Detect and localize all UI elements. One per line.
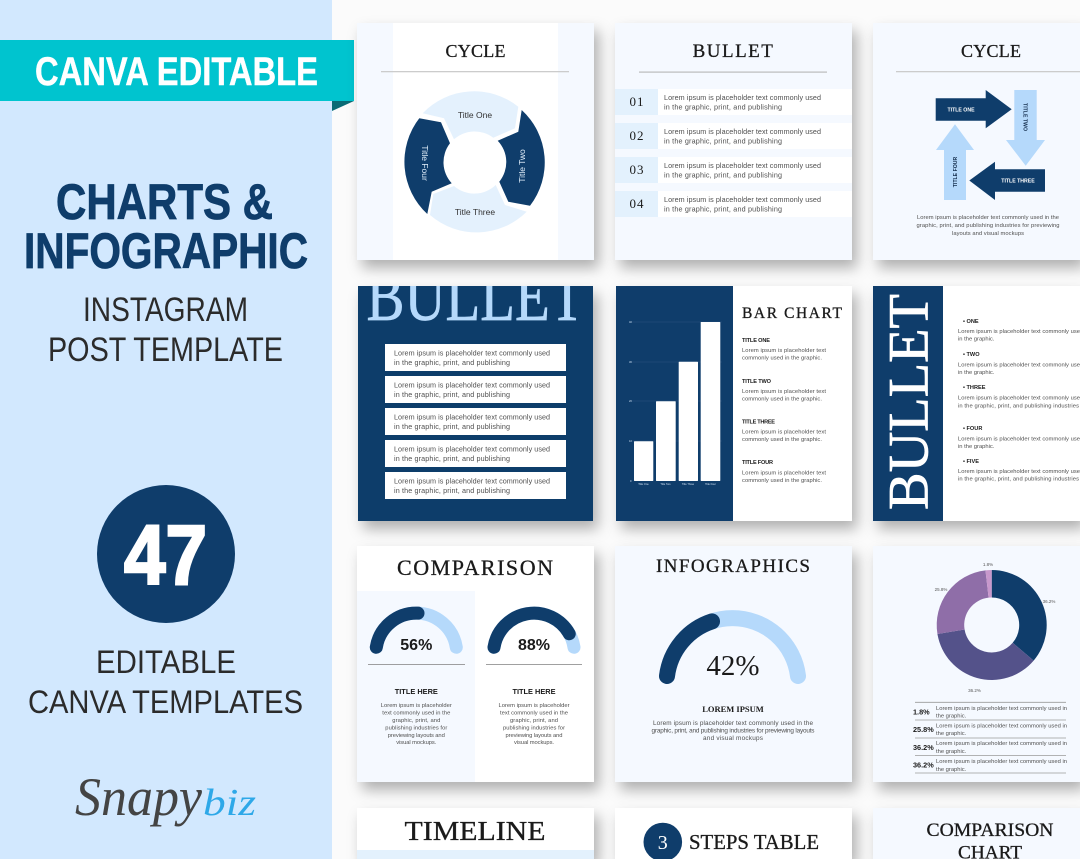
bullet rows: Lorem ipsum is placeholder text commonly used xyxy=(664,127,821,136)
bar chart: 20 xyxy=(629,399,632,403)
data table: 36.2% xyxy=(913,743,934,752)
caption: Lorem ipsum is placeholder text commonly used in the xyxy=(653,720,813,727)
heading xyxy=(926,820,1054,859)
column: right text: graphic, print, and xyxy=(510,718,558,724)
data table: 1.8% xyxy=(913,708,930,716)
body text xyxy=(916,215,1060,237)
bullet rows: 02 xyxy=(630,128,644,143)
data table: Lorem ipsum is placeholder text commonly used in xyxy=(936,759,1067,765)
bullet rows: Lorem ipsum is placeholder text commonly used xyxy=(664,161,821,170)
bar chart: 0 xyxy=(630,479,632,483)
data table: Lorem ipsum is placeholder text commonly used in xyxy=(936,706,1067,712)
chart notes: Lorem ipsum is placeholder text xyxy=(742,389,826,395)
cycle diagram: Title Three xyxy=(455,207,495,217)
caption: editable canva templates: CANVA TEMPLATES xyxy=(28,684,303,720)
data table: 25.8% xyxy=(913,725,934,734)
cycle diagram xyxy=(404,91,545,232)
panel: bar chart xyxy=(616,286,852,521)
bullet rows: in the graphic, print, and publishing xyxy=(664,170,782,180)
bullet boxes: Lorem ipsum is placeholder text commonly used xyxy=(394,444,550,454)
chart notes: Lorem ipsum is placeholder text xyxy=(742,430,826,436)
panel: comparison chart xyxy=(873,808,1080,859)
caption xyxy=(652,704,814,742)
panel: bullet vertical xyxy=(873,286,1080,521)
banner: canva editable: CANVA EDITABLE xyxy=(35,50,318,94)
column: right text: visual mockups. xyxy=(514,740,554,746)
bullet rows: Lorem ipsum is placeholder text commonly used xyxy=(664,195,821,204)
bar chart: Title One xyxy=(638,482,649,486)
arrow: title four: TITLE FOUR xyxy=(953,156,959,187)
chart notes: TITLE THREE xyxy=(742,420,775,426)
data table: the graphic. xyxy=(936,749,967,755)
bullet rows: 04 xyxy=(630,196,644,211)
data table: the graphic. xyxy=(936,714,967,720)
bullet list: Lorem ipsum is placeholder text commonly use xyxy=(958,436,1080,442)
chart notes: Lorem ipsum is placeholder text xyxy=(742,470,826,476)
bar chart: 40 xyxy=(629,320,632,324)
caption: editable canva templates xyxy=(28,644,303,720)
bullet list: Lorem ipsum is placeholder text commonly use xyxy=(958,329,1080,335)
arrow: title two xyxy=(1006,90,1045,166)
column: left text: visual mockups. xyxy=(396,740,437,746)
panel: infographics gauge xyxy=(615,546,852,782)
bullet rows: in the graphic, print, and publishing xyxy=(664,136,782,146)
step badge xyxy=(644,823,682,859)
banner: canva editable xyxy=(0,40,354,111)
heading: CYCLE xyxy=(961,41,1021,61)
bullet rows: Lorem ipsum is placeholder text commonly used xyxy=(664,93,821,102)
bullet boxes: in the graphic, print, and publishing xyxy=(394,358,510,367)
heading: INFOGRAPHICS xyxy=(656,556,810,577)
panel: comparison xyxy=(357,546,594,782)
body text: graphic, print, and publishing industries for previewing xyxy=(916,223,1060,229)
bullet boxes xyxy=(385,344,566,499)
bullet boxes: in the graphic, print, and publishing xyxy=(394,486,510,495)
panel: cycle donut xyxy=(357,23,594,260)
heading clipped: BULLET xyxy=(366,259,584,336)
column: left text xyxy=(381,687,452,746)
bullet list: Lorem ipsum is placeholder text commonly use xyxy=(958,362,1080,368)
arrow: title one xyxy=(936,90,1012,128)
heading: BULLET xyxy=(693,41,774,62)
arrow: title four xyxy=(936,124,974,200)
heading: CYCLE xyxy=(446,41,506,61)
bullet list: • TWO xyxy=(963,352,980,358)
bullet boxes: Lorem ipsum is placeholder text commonly used xyxy=(394,476,550,486)
bullet list: in the graphic. xyxy=(958,370,995,376)
chart notes: commonly used in the graphic. xyxy=(742,356,822,362)
gauge: 88%: 88% xyxy=(518,637,550,654)
gauge: 56%: 56% xyxy=(400,637,432,654)
logo: snapybiz: biz xyxy=(203,782,256,824)
heading: charts and infographic: CHARTS & xyxy=(56,174,273,230)
bullet rows: 01 xyxy=(630,94,644,109)
badge: 47: 47 xyxy=(124,508,207,602)
caption: LOREM IPSUM xyxy=(702,704,764,714)
column: left text: Lorem ipsum is placeholder xyxy=(381,703,452,709)
arrow: title one: TITLE ONE xyxy=(947,108,975,114)
heading: STEPS TABLE xyxy=(689,830,819,854)
body text: layouts and visual mockups xyxy=(952,231,1024,237)
column: left text: text commonly used in the xyxy=(382,710,450,716)
bullet rows: in the graphic, print, and publishing xyxy=(664,102,782,112)
bullet list: • THREE xyxy=(963,385,986,391)
chart notes: TITLE TWO xyxy=(742,379,772,385)
bullet list: in the graphic, print, and publishing industries xyxy=(958,476,1079,482)
caption: editable canva templates: EDITABLE xyxy=(96,644,236,680)
panel: timeline xyxy=(357,808,594,859)
body text: Lorem ipsum is placeholder text commonly used in the xyxy=(917,215,1059,221)
panel: steps table xyxy=(615,808,852,859)
cycle diagram: Title One xyxy=(458,110,492,120)
bar chart: 10 xyxy=(629,439,632,443)
column: right text: TITLE HERE xyxy=(512,687,556,696)
column: right text: previewing layouts and xyxy=(506,733,562,739)
data table: Lorem ipsum is placeholder text commonly used in xyxy=(936,741,1067,747)
data table: the graphic. xyxy=(936,731,967,737)
bullet boxes: in the graphic, print, and publishing xyxy=(394,390,510,399)
chart notes: TITLE ONE xyxy=(742,338,770,344)
cycle diagram: Title Four xyxy=(420,145,430,181)
panel: bullet list light xyxy=(615,23,852,260)
bullet list: • FOUR xyxy=(963,426,982,432)
bullet boxes: in the graphic, print, and publishing xyxy=(394,422,510,431)
logo: snapybiz: Snapy xyxy=(75,767,202,827)
heading: TIMELINE xyxy=(404,816,546,846)
bullet list: • ONE xyxy=(963,319,979,325)
bar chart: Title Two xyxy=(660,482,671,486)
bullet rows xyxy=(615,89,852,217)
panel: cycle arrows xyxy=(873,23,1080,260)
column: right text: text commonly used in the xyxy=(500,710,568,716)
bar chart: Title Three xyxy=(682,482,695,486)
arrow: title two: TITLE TWO xyxy=(1022,103,1028,131)
panel: donut chart xyxy=(873,546,1080,782)
chart notes: TITLE FOUR xyxy=(742,460,773,466)
heading: COMPARISON xyxy=(926,820,1054,841)
subheading: instagram post template: INSTAGRAM xyxy=(83,291,248,329)
data table xyxy=(913,702,1067,773)
bullet list: • FIVE xyxy=(963,459,979,465)
heading vertical: BULLET xyxy=(878,294,940,510)
bullet boxes: Lorem ipsum is placeholder text commonly used xyxy=(394,380,550,390)
data table: 36.2% xyxy=(913,760,934,770)
gauge: 56% xyxy=(376,613,456,654)
chart notes xyxy=(742,338,826,484)
bar chart xyxy=(629,320,722,486)
column: left text: previewing layouts and xyxy=(388,733,445,739)
bullet boxes: Lorem ipsum is placeholder text commonly used xyxy=(394,348,550,358)
bullet list: in the graphic, print, and publishing industries xyxy=(958,404,1079,410)
donut chart: 36.2% xyxy=(968,688,981,693)
data table: Lorem ipsum is placeholder text commonly used in xyxy=(936,724,1067,730)
column: left text: publishing industries for xyxy=(385,726,447,732)
heading: COMPARISON xyxy=(397,555,553,580)
bullet rows: in the graphic, print, and publishing xyxy=(664,204,782,214)
chart notes: commonly used in the graphic. xyxy=(742,396,822,402)
column: right text: Lorem ipsum is placeholder xyxy=(498,703,570,709)
donut chart xyxy=(935,562,1055,693)
badge: 47 xyxy=(97,485,235,623)
caption: graphic, print, and publishing industries for previewing layouts xyxy=(652,728,814,734)
caption: and visual mockups xyxy=(703,735,763,742)
heading: BAR CHART xyxy=(742,305,843,322)
subheading: instagram post template: POST TEMPLATE xyxy=(48,331,283,369)
gauge: 42% xyxy=(667,618,798,682)
column: left text: graphic, print, and xyxy=(392,718,440,724)
panel: left sidebar xyxy=(0,0,354,859)
bullet list: in the graphic. xyxy=(958,444,995,450)
donut chart: 1.8% xyxy=(983,562,993,567)
chart notes: commonly used in the graphic. xyxy=(742,437,822,443)
bullet list: Lorem ipsum is placeholder text commonly use xyxy=(958,469,1080,475)
cycle diagram: Title Two xyxy=(517,149,527,183)
bar chart: Title Four xyxy=(705,482,716,486)
panel: bullet navy xyxy=(358,259,593,521)
gauge: 88% xyxy=(494,613,574,654)
bullet boxes: Lorem ipsum is placeholder text commonly used xyxy=(394,412,550,422)
arrow: title three xyxy=(969,162,1045,200)
step badge: 3 xyxy=(658,832,668,854)
subheading: instagram post template xyxy=(48,291,283,369)
bullet list xyxy=(958,319,1080,482)
heading: charts and infographic: INFOGRAPHIC xyxy=(24,223,308,279)
bullet list: in the graphic. xyxy=(958,336,995,342)
column: left text: TITLE HERE xyxy=(395,687,438,696)
gauge: 42%: 42% xyxy=(706,650,760,682)
column: right text: publishing industries for xyxy=(503,726,565,732)
donut chart: 25.8% xyxy=(935,587,947,592)
chart notes: Lorem ipsum is placeholder text xyxy=(742,348,826,354)
data table: the graphic. xyxy=(936,767,967,773)
bar chart: 30 xyxy=(629,360,632,364)
arrow: title three: TITLE THREE xyxy=(1001,178,1035,184)
heading: charts and infographic xyxy=(24,174,308,279)
bullet boxes: in the graphic, print, and publishing xyxy=(394,454,510,463)
bullet rows: 03 xyxy=(630,162,644,177)
column: right text xyxy=(498,687,570,746)
bullet list: Lorem ipsum is placeholder text commonly use xyxy=(958,396,1080,402)
chart notes: commonly used in the graphic. xyxy=(742,478,822,484)
donut chart: 36.2% xyxy=(1043,599,1055,604)
